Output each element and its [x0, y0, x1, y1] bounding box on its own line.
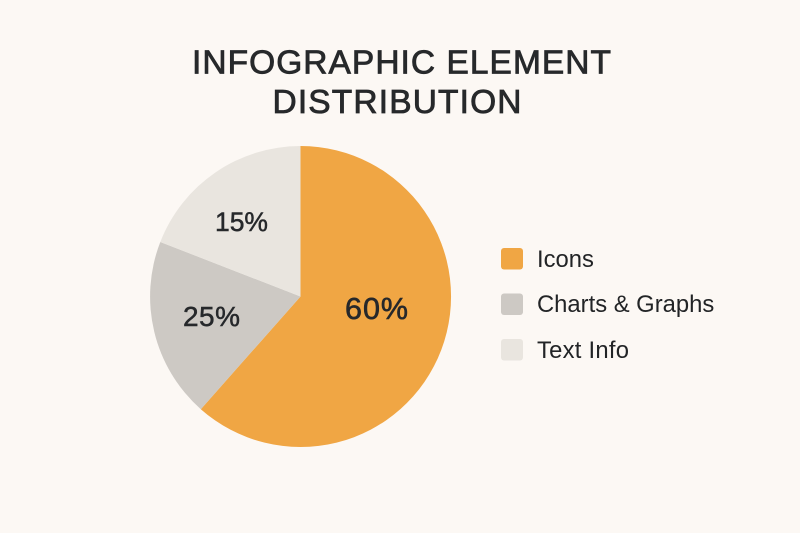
- legend item: Text Info: Text Info: [537, 337, 629, 364]
- legend item: Charts & Graphs: Charts & Graphs: [537, 291, 714, 318]
- legend item: Icons: Icons: [537, 246, 594, 273]
- legend item: Icons: [501, 246, 594, 273]
- legend: [501, 246, 714, 364]
- title: INFOGRAPHIC ELEMENT: [192, 44, 611, 82]
- title: DISTRIBUTION: [272, 84, 522, 121]
- slice: Text Info 15%: [160, 146, 300, 296]
- label: 15%: 15%: [215, 207, 268, 237]
- slice: Charts & Graphs 25%: [150, 242, 300, 409]
- pie chart: [150, 146, 451, 447]
- title: [192, 44, 611, 121]
- label: 25%: 25%: [183, 301, 240, 332]
- label: 60%: 60%: [345, 292, 408, 326]
- slice: Icons 60%: [201, 146, 451, 447]
